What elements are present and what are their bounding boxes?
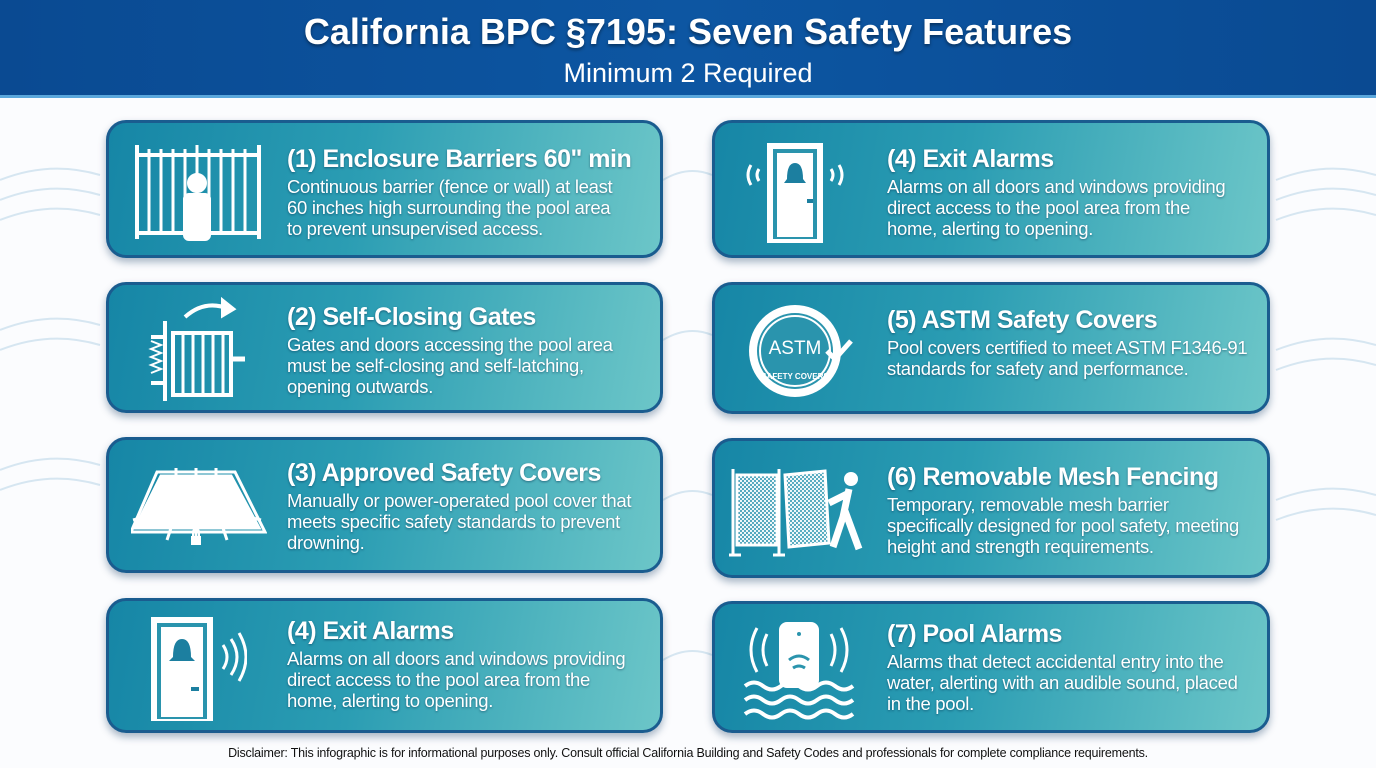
panel: 1 enclosure barriers <box>106 120 663 258</box>
panel: 5 ASTM safety covers <box>712 282 1270 414</box>
panel: 6 removable mesh fencing <box>712 438 1270 578</box>
text: (5) ASTM Safety Covers <box>887 306 1157 334</box>
text: direct access to the pool area from the <box>887 197 1190 218</box>
icon: door alarm <box>151 617 247 721</box>
icon: pool cover <box>131 468 267 545</box>
header <box>0 0 1376 98</box>
text <box>886 620 1238 716</box>
text: opening outwards. <box>287 376 433 397</box>
icon: pool alarm in water <box>744 622 854 720</box>
text: Alarms on all doors and windows providing <box>887 176 1225 197</box>
text: 60 inches high surrounding the pool area <box>287 197 610 218</box>
icon: fence with person <box>135 145 261 241</box>
panel: 4 exit alarms (left bottom) <box>106 598 663 733</box>
text <box>286 303 614 399</box>
panel: 2 self-closing gates <box>106 282 663 413</box>
icon: mesh fence with person <box>729 469 862 556</box>
text: meets specific safety standards to prevent <box>287 511 620 532</box>
title: California BPC §7195: Seven Safety Features <box>304 11 1072 52</box>
text: Alarms that detect accidental entry into the <box>887 651 1223 672</box>
text <box>286 617 626 713</box>
text: in the pool. <box>887 693 974 714</box>
text <box>286 459 632 555</box>
text: Manually or power-operated pool cover that <box>287 490 631 511</box>
text: (4) Exit Alarms <box>887 145 1054 173</box>
icon: gate with spring <box>148 297 245 401</box>
text <box>887 306 1248 381</box>
text: home, alerting to opening. <box>287 690 493 711</box>
text: (4) Exit Alarms <box>287 617 454 645</box>
text: (3) Approved Safety Covers <box>287 459 601 487</box>
text <box>286 145 632 241</box>
text: (2) Self-Closing Gates <box>287 303 536 331</box>
icon: ASTM badge: ASTM <box>769 338 821 359</box>
text: specifically designed for pool safety, meeting <box>887 515 1239 536</box>
text: (7) Pool Alarms <box>887 620 1062 648</box>
text: Pool covers certified to meet ASTM F1346-91 <box>887 337 1247 358</box>
text: Gates and doors accessing the pool area <box>287 334 613 355</box>
panel: 7 pool alarms <box>712 601 1270 733</box>
text <box>887 463 1240 559</box>
icon: ASTM badge <box>749 305 853 397</box>
text: standards for safety and performance. <box>887 358 1189 379</box>
text: to prevent unsupervised access. <box>287 218 543 239</box>
text: direct access to the pool area from the <box>287 669 590 690</box>
text: water, alerting with an audible sound, placed <box>887 672 1238 693</box>
text: Alarms on all doors and windows providing <box>287 648 625 669</box>
text: (6) Removable Mesh Fencing <box>887 463 1219 491</box>
panel: 4 exit alarms (right top) <box>712 120 1270 258</box>
text: drowning. <box>287 532 365 553</box>
text: Temporary, removable mesh barrier <box>887 494 1169 515</box>
text: home, alerting to opening. <box>887 218 1093 239</box>
text: (1) Enclosure Barriers 60" min <box>287 145 631 173</box>
text: height and strength requirements. <box>887 536 1154 557</box>
icon: ASTM badge: SAFETY COVERS <box>761 372 829 381</box>
text: Continuous barrier (fence or wall) at least <box>287 176 612 197</box>
icon: door alarm <box>746 143 844 243</box>
text <box>886 145 1226 241</box>
subtitle: Minimum 2 Required <box>563 58 813 88</box>
panel: 3 approved safety covers <box>106 437 663 573</box>
text: must be self-closing and self-latching, <box>287 355 584 376</box>
disclaimer: Disclaimer: This infographic is for informational purposes only. Consult official California Building and Safety Codes and professionals for complete compliance requirements. <box>228 746 1148 760</box>
